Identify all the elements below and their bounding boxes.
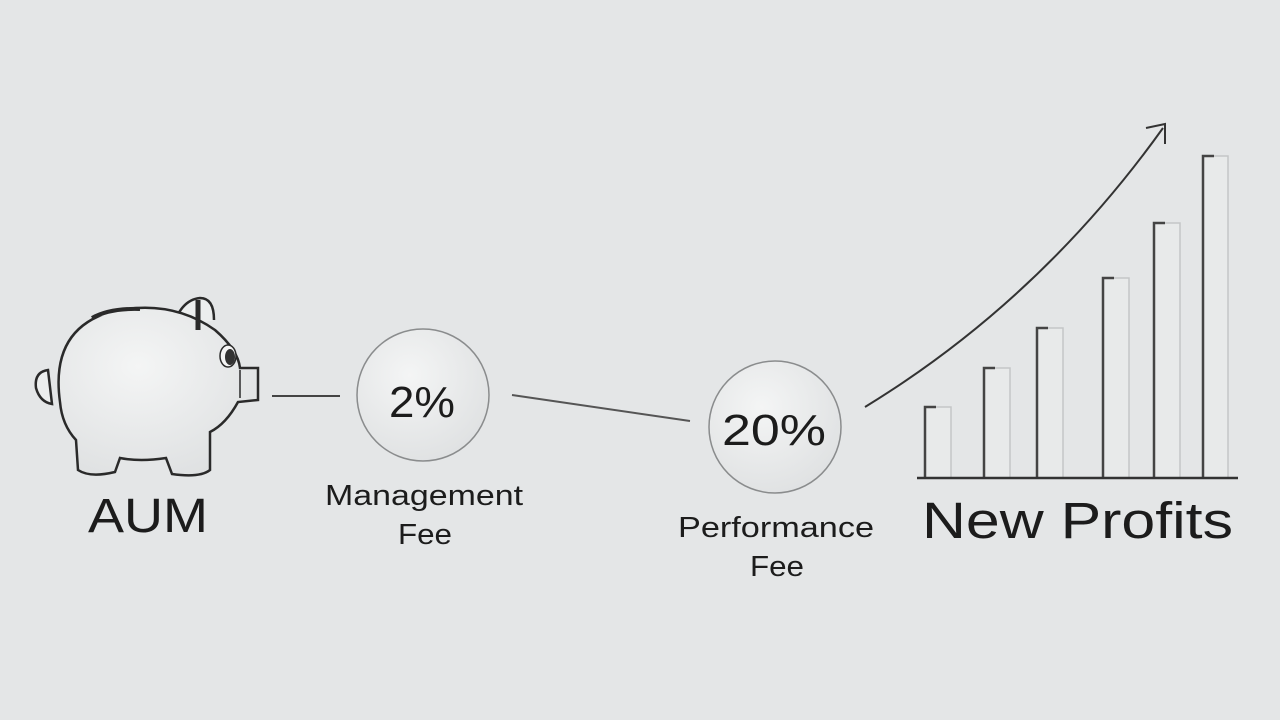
label: performance fee: Performance: [678, 512, 874, 544]
label: AUM: AUM: [88, 490, 208, 543]
icon: piggy bank: [36, 298, 258, 475]
connector line 2: [512, 395, 690, 421]
arrow: growth curve: [865, 124, 1165, 407]
circle: performance fee 20%: [709, 361, 841, 493]
label: performance fee: Fee: [750, 551, 804, 583]
label: management fee: Fee: [398, 519, 452, 551]
bar chart: new profits: [917, 156, 1238, 478]
connector line 1: [272, 395, 340, 397]
circle: performance fee 20%: 20%: [722, 406, 826, 455]
label: new profits: New Profits: [922, 492, 1233, 549]
circle: management fee 2%: [357, 329, 489, 461]
circle: management fee 2%: 2%: [389, 378, 455, 427]
label: management fee: Management: [325, 480, 523, 512]
